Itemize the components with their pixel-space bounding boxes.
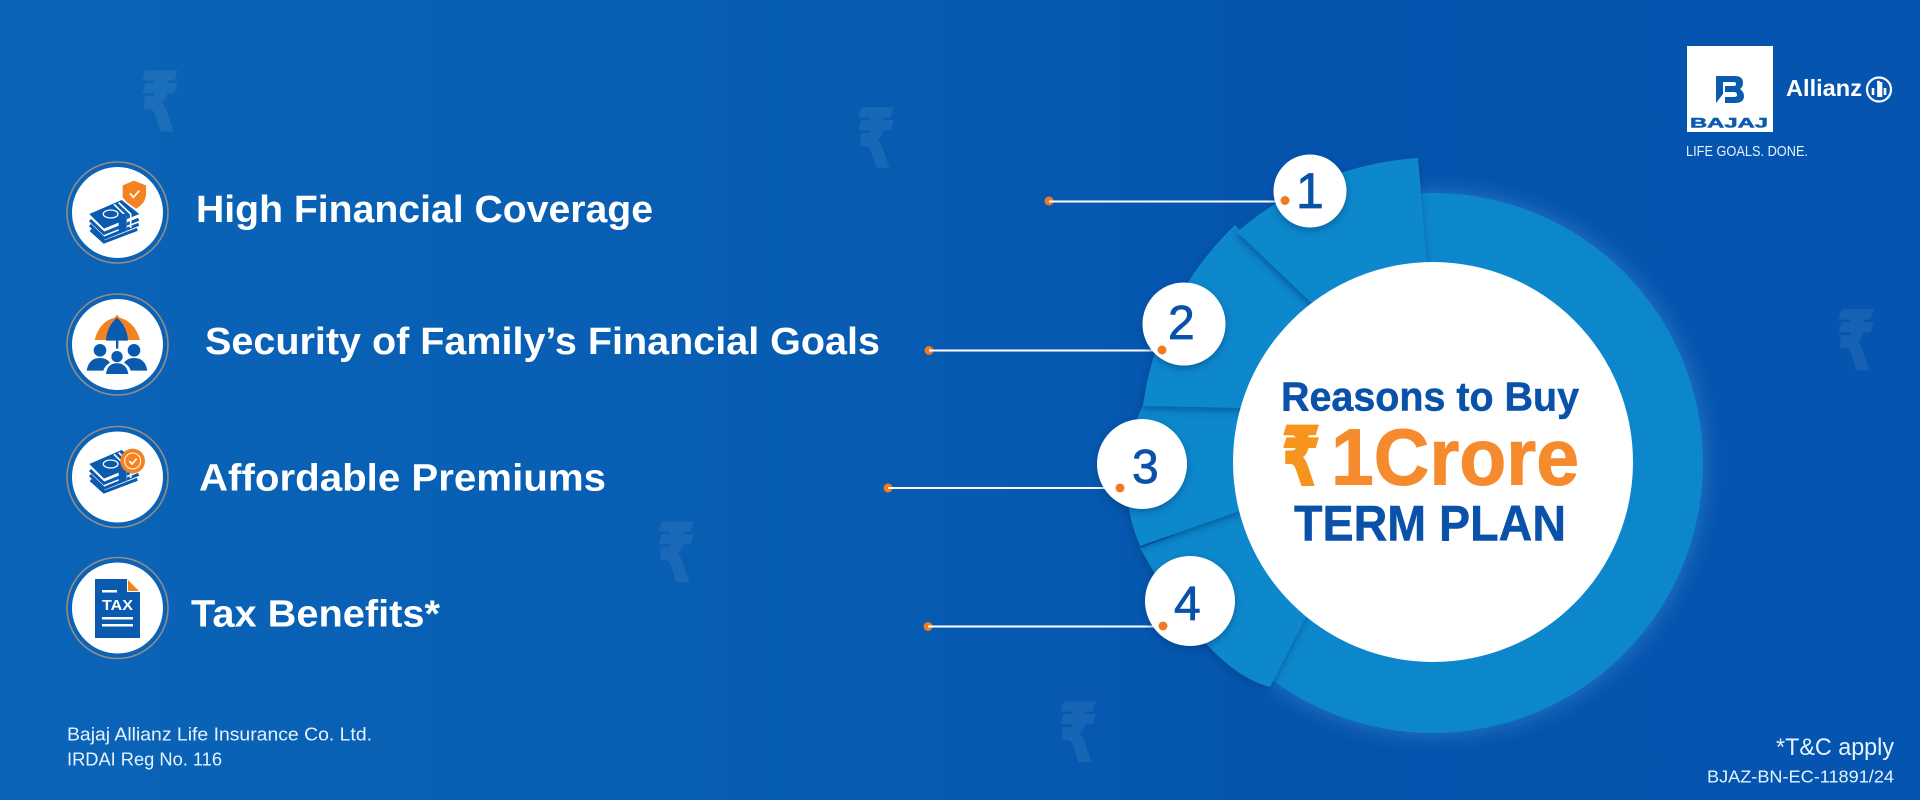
chart: ring with segments bbox=[1126, 158, 1703, 733]
footer: terms and code: *T&C apply bbox=[1776, 734, 1894, 761]
item 4: tax benefits bbox=[67, 558, 440, 658]
number bubble 4: 4 bbox=[1174, 578, 1201, 631]
icon: tax document bbox=[67, 558, 168, 658]
number bubble 4 bbox=[1145, 556, 1235, 646]
item 3: affordable premiums bbox=[67, 426, 606, 528]
watermark rupee symbols: ₹ bbox=[857, 95, 895, 184]
label: affordable premiums: Affordable Premiums bbox=[199, 458, 606, 500]
item 1: high financial coverage bbox=[67, 162, 653, 263]
number bubble 1 bbox=[1274, 154, 1346, 228]
footer: company and registration bbox=[67, 724, 372, 770]
label: tax benefits: Tax Benefits* bbox=[191, 594, 440, 636]
logo: Bajaj Allianz: LIFE GOALS. DONE. bbox=[1686, 143, 1808, 160]
center title: TERM PLAN bbox=[1294, 496, 1566, 552]
icon: umbrella over family bbox=[67, 294, 168, 395]
outer ring bbox=[1163, 193, 1703, 733]
item 2: security of family's financial goals bbox=[67, 294, 880, 395]
center white circle bbox=[1233, 262, 1633, 662]
segment 4 bbox=[1140, 490, 1320, 687]
center title: 1Crore bbox=[1331, 412, 1579, 502]
segment 2 bbox=[1143, 225, 1340, 409]
ring glow bbox=[1161, 191, 1705, 735]
connector 2 bbox=[924, 346, 1154, 355]
label: security of family's financial goals: Security of Family’s Financial Goals bbox=[205, 321, 880, 363]
number bubble 2 bbox=[1142, 282, 1226, 366]
footer: terms and code bbox=[1707, 734, 1894, 786]
number bubble 3 bbox=[1097, 419, 1187, 509]
watermark rupee symbols: ₹ bbox=[1837, 297, 1875, 386]
connector 3 bbox=[884, 484, 1113, 492]
watermark rupee symbols: ₹ bbox=[141, 58, 179, 147]
center title: ₹ bbox=[1282, 412, 1320, 502]
label: high financial coverage: High Financial Coverage bbox=[196, 189, 653, 231]
icon: tax document: TAX bbox=[102, 597, 133, 614]
footer: company and registration: IRDAI Reg No. 116 bbox=[67, 748, 222, 770]
footer: terms and code: BJAZ-BN-EC-11891/24 bbox=[1707, 766, 1894, 786]
number bubble 3: 3 bbox=[1132, 441, 1159, 494]
center title bbox=[1281, 374, 1579, 552]
icon: cash with shield bbox=[67, 162, 168, 263]
segment 1 bbox=[1237, 158, 1430, 330]
connector 1 bbox=[1044, 196, 1281, 206]
number bubble 1: 1 bbox=[1296, 163, 1324, 219]
number bubble 2: 2 bbox=[1168, 297, 1195, 350]
panel: reasons list bbox=[67, 162, 880, 658]
segment 3 bbox=[1126, 390, 1300, 546]
footer: company and registration: Bajaj Allianz Life Insurance Co. Ltd. bbox=[67, 724, 372, 744]
icon: cash with rosette bbox=[67, 426, 168, 528]
watermark rupee symbols: ₹ bbox=[1059, 689, 1097, 778]
logo: Bajaj Allianz: Allianz bbox=[1786, 75, 1862, 101]
watermark rupee symbols: ₹ bbox=[657, 509, 695, 598]
center title: Reasons to Buy bbox=[1281, 374, 1579, 420]
logo: Bajaj Allianz bbox=[1686, 46, 1891, 160]
logo: Bajaj Allianz: BAJAJ bbox=[1690, 114, 1768, 130]
connector 4 bbox=[924, 622, 1158, 631]
